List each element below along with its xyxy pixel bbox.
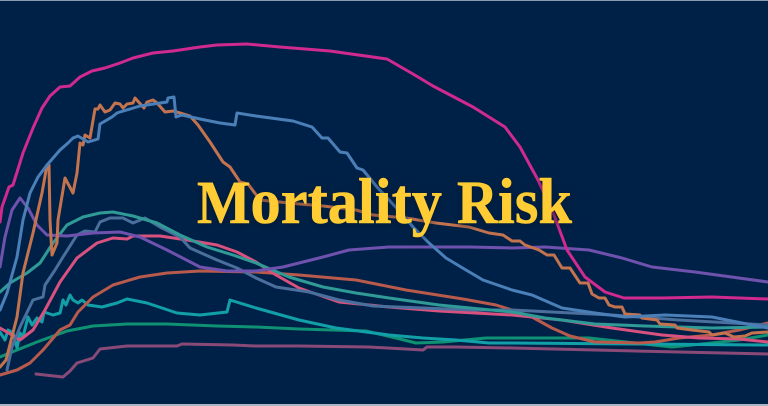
line: cyan teal (0, 295, 768, 348)
line: teal (0, 212, 768, 328)
line: purple (0, 198, 768, 282)
line: mauve (36, 344, 768, 377)
line: orange (0, 98, 768, 367)
line: slate blue (7, 218, 768, 370)
line: red brown (0, 271, 768, 375)
line: magenta (0, 44, 768, 299)
title: Mortality Risk (197, 166, 573, 238)
line: pink (0, 236, 768, 342)
line: green (0, 324, 768, 357)
line: blue (0, 97, 768, 328)
